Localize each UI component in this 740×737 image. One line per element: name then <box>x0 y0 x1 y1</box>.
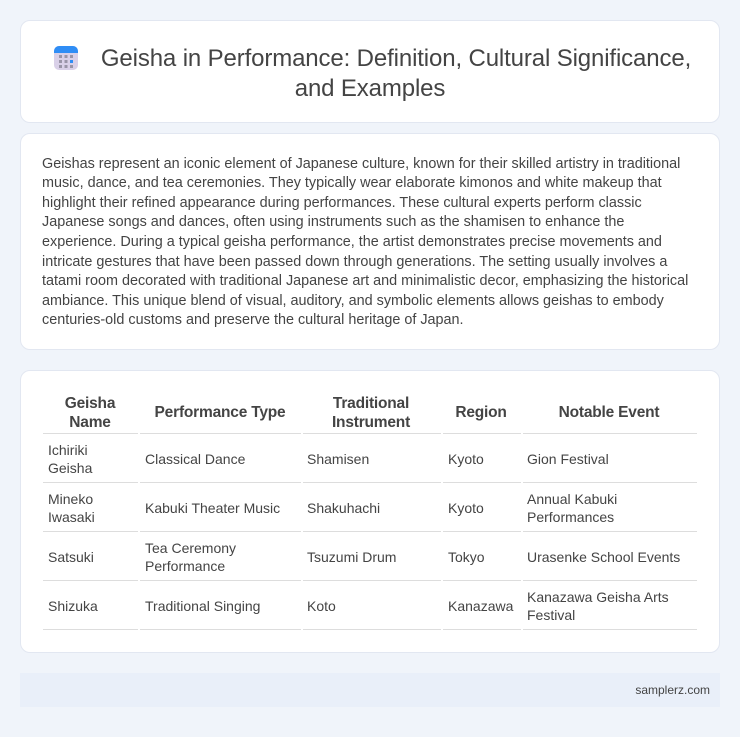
row 3: Performance <box>145 558 225 574</box>
panel: description: music, dance, and tea ceremonies. They typically wear elaborate kimonos and white makeup that <box>42 175 662 191</box>
footer text: samplerz.com: samplerz.com <box>635 683 710 697</box>
table header: Performance Type <box>155 404 285 421</box>
title: and Examples <box>295 75 445 102</box>
table header: Region <box>455 404 507 421</box>
panel: description: Geishas represent an iconic element of Japanese culture, known for their skilled artistry in traditional <box>42 156 680 172</box>
table header: Name <box>69 414 111 431</box>
row 4: Koto <box>307 598 336 614</box>
row 2: Performances <box>527 509 614 525</box>
row 1 <box>48 442 609 476</box>
row 3 <box>48 540 680 574</box>
panel: description: highlight their refined appearance during performances. These cultural experts perform classic <box>42 195 642 211</box>
row 3: Tea Ceremony <box>145 540 236 556</box>
row 3: Tsuzumi Drum <box>307 549 396 565</box>
panel: description: centuries-old customs and preserve the cultural heritage of Japan. <box>42 312 464 328</box>
row 2: Kyoto <box>448 500 484 516</box>
table header: Geisha <box>65 395 115 412</box>
row 3: Satsuki <box>48 549 94 565</box>
row 1: Classical Dance <box>145 451 245 467</box>
row 3: Tokyo <box>448 549 485 565</box>
row 4: Shizuka <box>48 598 98 614</box>
table header: Notable Event <box>559 404 659 421</box>
title: Geisha in Performance: Definition, Cultural Significance, <box>101 45 691 72</box>
header card <box>20 20 720 123</box>
panel: table <box>20 370 720 653</box>
row 3: Urasenke School Events <box>527 549 680 565</box>
table header <box>65 395 660 431</box>
row 1: Shamisen <box>307 451 369 467</box>
panel: description <box>20 133 720 350</box>
panel: description: tatami room decorated with traditional Japanese art and minimalistic decor, emphasizing the historical <box>42 273 688 289</box>
row 2 <box>48 491 617 525</box>
panel: description: experience. During a typical geisha performance, the artist demonstrates precise movements and <box>42 234 662 250</box>
row 1: Ichiriki <box>48 442 88 458</box>
row 2: Shakuhachi <box>307 500 380 516</box>
panel: description: Japanese songs and dances, often using instruments such as the shamisen to enhance the <box>42 214 624 230</box>
panel: description: ambiance. This unique blend of visual, auditory, and symbolic elements allows geishas to embody <box>42 293 664 309</box>
icon: calendar <box>54 46 78 70</box>
panel: description: intricate gestures that have been passed down through generations. The setting usually involves a <box>42 254 667 270</box>
title <box>101 45 691 102</box>
row 1: Kyoto <box>448 451 484 467</box>
row 4: Kanazawa <box>448 598 513 614</box>
row 4: Festival <box>527 607 575 623</box>
footer <box>20 673 720 707</box>
row 4: Traditional Singing <box>145 598 260 614</box>
row 1: Geisha <box>48 460 92 476</box>
table header: Instrument <box>332 414 410 431</box>
row 4: Kanazawa Geisha Arts <box>527 589 669 605</box>
row 2: Mineko <box>48 491 93 507</box>
row 2: Iwasaki <box>48 509 95 525</box>
row 4 <box>48 589 669 623</box>
row 2: Annual Kabuki <box>527 491 617 507</box>
table header: Traditional <box>333 395 409 412</box>
row 2: Kabuki Theater Music <box>145 500 280 516</box>
row 1: Gion Festival <box>527 451 609 467</box>
